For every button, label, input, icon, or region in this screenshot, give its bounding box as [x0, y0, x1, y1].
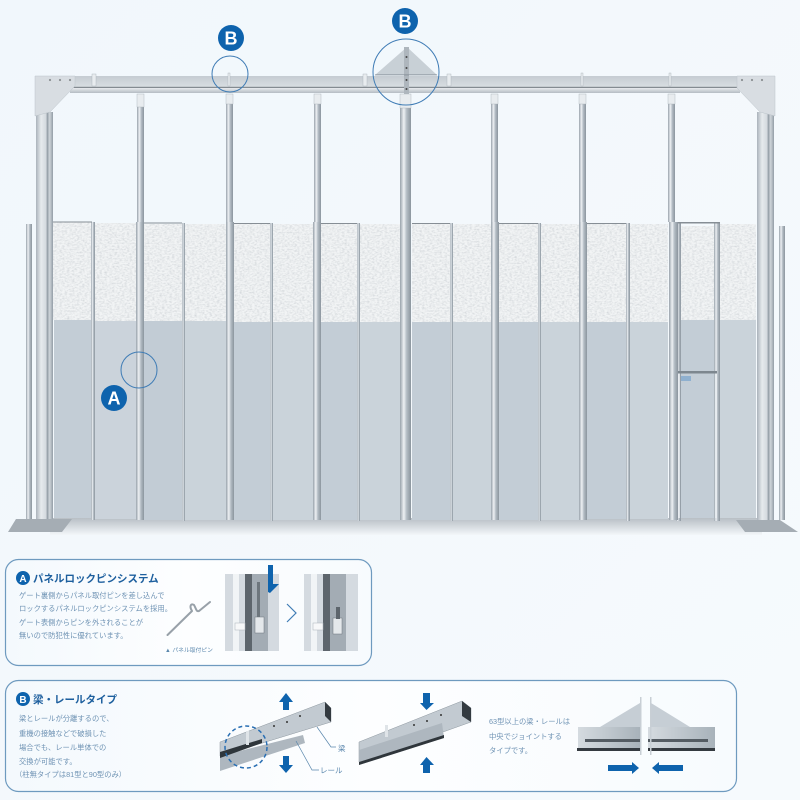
icon: lock pin [168, 602, 210, 635]
text block: A description: 無いので防犯性に優れています。 [19, 631, 128, 640]
photo: pin inserted [225, 574, 279, 651]
arrow: insert down [268, 565, 279, 593]
heading: B: 梁・レールタイプ [33, 693, 117, 706]
mesh upper panels [53, 222, 756, 322]
text block: joint note: 中央でジョイントする [489, 732, 562, 741]
text block: B description: 梁とレールが分離するので、 [19, 714, 114, 723]
top beam [70, 76, 740, 93]
lower panels [54, 320, 756, 520]
centre gusset [375, 47, 437, 94]
text block: B description: 場合でも、レール単体での [19, 743, 106, 752]
text block: A description: ゲート表側からピンを外されることが [19, 618, 144, 627]
drawing: right joint [648, 697, 715, 755]
panel: B beam and rail type [6, 680, 736, 792]
callout: marker B beam: B [224, 28, 238, 48]
panel: A panel lock pin system [6, 560, 372, 666]
arrow: press down [420, 693, 434, 710]
text block: joint note: 63型以上の梁・レールは [489, 717, 570, 726]
heading: B: B [19, 695, 27, 706]
text block: joint note: タイプです。 [489, 746, 532, 755]
text block: B description: （柱無タイプは81型と90型のみ） [15, 770, 126, 779]
beam tabs [92, 73, 675, 108]
heading: A: A [19, 574, 27, 585]
label: rail [296, 741, 343, 775]
side columns [36, 112, 774, 520]
callout: marker A [101, 352, 157, 411]
text block: A description: ロックするパネルロックピンシステムを採用。 [19, 604, 172, 613]
drawing: left joint [577, 697, 642, 755]
corner gussets [35, 76, 775, 116]
dashed highlight circle [225, 726, 267, 768]
text block: A description [19, 591, 172, 640]
label: rail: レール [320, 766, 343, 775]
arrow: join left [652, 762, 683, 774]
text block: B description [15, 714, 126, 779]
callout: marker B centre: B [398, 12, 412, 32]
hanging posts [136, 94, 678, 520]
arrow: rail down [279, 756, 293, 773]
text block: B description: 重機の接触などで破損した [19, 729, 106, 738]
panel seams [53, 222, 720, 521]
photo: pin locked [304, 574, 358, 651]
drawing: joined beam and rail [359, 701, 471, 765]
arrow: press up [420, 757, 434, 773]
arrow: chevron [287, 604, 296, 622]
text block: A description: ゲート裏側からパネル取付ピンを差し込んで [19, 591, 165, 600]
callout: marker B beam [212, 25, 248, 92]
side poles and base plates [8, 224, 798, 532]
text block: joint note [489, 717, 570, 755]
pin caption: ▲ パネル取付ピン [165, 646, 213, 654]
small door [678, 371, 717, 518]
label: beam [317, 727, 346, 753]
arrow: join right [608, 762, 639, 774]
drawing: separated beam and rail [220, 702, 331, 771]
callout: marker B centre [373, 8, 439, 105]
label: beam: 梁 [338, 744, 346, 753]
arrow: beam up [279, 693, 293, 710]
heading: A: パネルロックピンシステム [33, 573, 159, 585]
callout: marker A: A [108, 388, 120, 408]
gate illustration [8, 47, 798, 535]
text block: B description: 交換が可能です。 [19, 757, 77, 766]
